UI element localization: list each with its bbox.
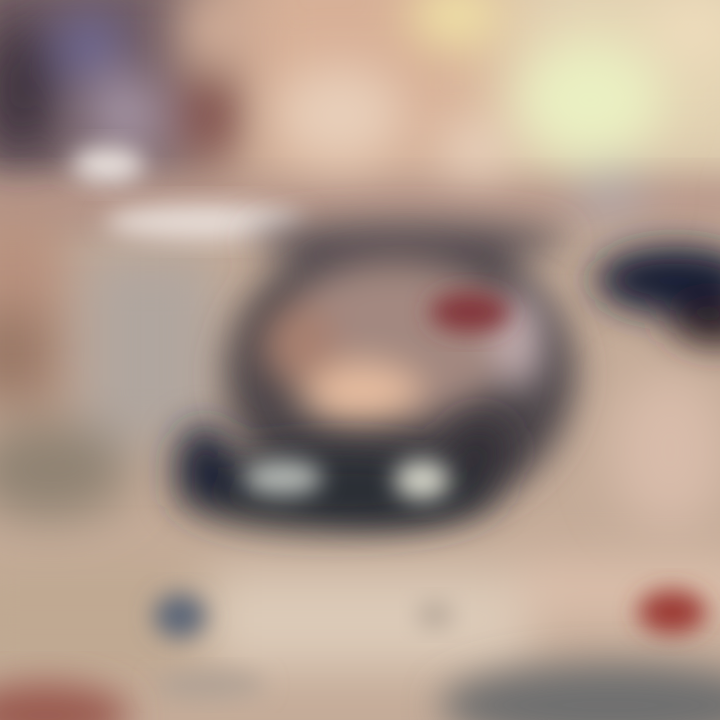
red accent [430, 292, 510, 332]
dark ring around centre [225, 220, 575, 520]
background: upper scene [0, 0, 720, 190]
grey object bottom right [440, 663, 720, 720]
left hand and grey panel [0, 215, 215, 520]
blue dot [154, 594, 206, 638]
centre of ring [262, 260, 544, 425]
small faint dot [417, 601, 453, 629]
dark navy band at right [595, 246, 720, 347]
upper details [0, 0, 720, 217]
base of object [175, 420, 510, 532]
highlight spot [72, 147, 144, 183]
red object [638, 590, 706, 634]
grey smudge [155, 671, 265, 699]
white bar [105, 204, 305, 240]
middle band [0, 180, 720, 225]
white spots on base [243, 460, 450, 500]
table details [0, 590, 720, 720]
table surface [0, 560, 720, 675]
reddish corner bottom left [0, 683, 130, 720]
right side warm area [610, 370, 720, 530]
